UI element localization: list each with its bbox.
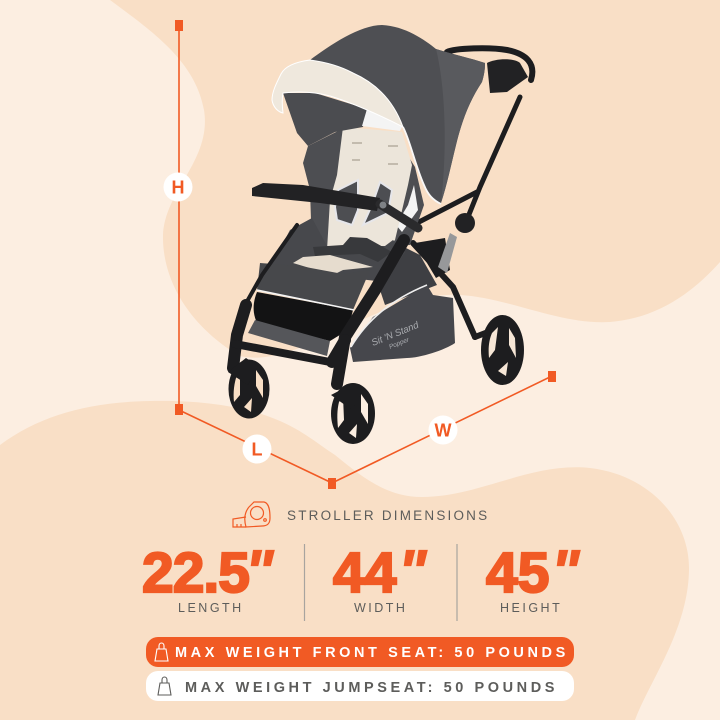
badge: W xyxy=(428,416,458,444)
icon: tape measure xyxy=(233,502,270,527)
stat: length xyxy=(142,538,275,615)
stat: width: 44 xyxy=(333,541,397,605)
stroller xyxy=(228,25,532,444)
badge: W: W xyxy=(434,420,452,440)
stat: height: " xyxy=(551,538,581,605)
pill: jumpseat: MAX WEIGHT JUMPSEAT: 50 POUNDS xyxy=(185,680,558,696)
pill: jumpseat xyxy=(146,671,574,701)
basket label: Sit 'N Stand xyxy=(370,320,421,349)
rear frame and handle xyxy=(405,48,532,337)
badge: L: L xyxy=(252,440,262,460)
seat bottom xyxy=(262,218,405,282)
background blob: bottom xyxy=(0,401,689,720)
badge: H xyxy=(164,172,192,202)
divider xyxy=(304,544,306,621)
stat: width: " xyxy=(398,538,428,605)
canopy piping xyxy=(403,127,441,204)
canopy interior xyxy=(283,93,367,146)
dimension lines xyxy=(179,25,552,483)
black pocket xyxy=(254,292,353,341)
canopy top xyxy=(310,25,485,203)
stat: length: 22.5 xyxy=(142,541,249,605)
canopy side panel xyxy=(436,49,485,203)
cup holder xyxy=(487,59,528,93)
canopy straps xyxy=(362,109,402,131)
badge: L xyxy=(242,434,272,464)
stat: length: " xyxy=(245,538,275,605)
seat liner xyxy=(327,127,412,250)
basket trim xyxy=(351,285,427,347)
divider xyxy=(456,544,458,621)
basket label: Popper xyxy=(388,336,411,351)
rear black storage xyxy=(415,238,450,278)
badge: H: H xyxy=(172,178,184,198)
pill: front seat xyxy=(146,637,574,667)
stat: height: 45 xyxy=(486,541,549,605)
rear arm bracket xyxy=(438,233,457,273)
seat back white piping right xyxy=(396,185,418,232)
harness pads xyxy=(335,180,392,225)
front left wheel xyxy=(228,358,270,418)
tray arm xyxy=(380,204,418,228)
stat: width xyxy=(333,538,428,615)
front frame xyxy=(233,225,404,384)
section heading: STROLLER DIMENSIONS xyxy=(287,508,489,523)
seat cushion xyxy=(293,255,373,275)
tray xyxy=(252,183,380,211)
front right wheel xyxy=(331,383,375,444)
frame knob xyxy=(455,213,475,233)
stat: length: LENGTH xyxy=(178,601,244,615)
stat: height: HEIGHT xyxy=(500,601,562,615)
upper liner creases xyxy=(352,143,398,164)
canopy front band xyxy=(272,60,403,127)
footrest cover xyxy=(257,263,370,310)
seat back wings xyxy=(303,130,424,250)
lower platform xyxy=(248,320,330,356)
dimension end markers xyxy=(175,20,556,489)
pocket trim xyxy=(257,290,354,310)
basket xyxy=(350,285,455,362)
rear wheel xyxy=(481,315,524,385)
stat: height xyxy=(486,538,581,615)
lap strap and buckle xyxy=(313,237,392,262)
background blob: top xyxy=(110,0,720,358)
seat side fill xyxy=(375,240,437,305)
stat: width: WIDTH xyxy=(354,601,407,615)
pill: front seat: MAX WEIGHT FRONT SEAT: 50 POUNDS xyxy=(175,645,569,661)
